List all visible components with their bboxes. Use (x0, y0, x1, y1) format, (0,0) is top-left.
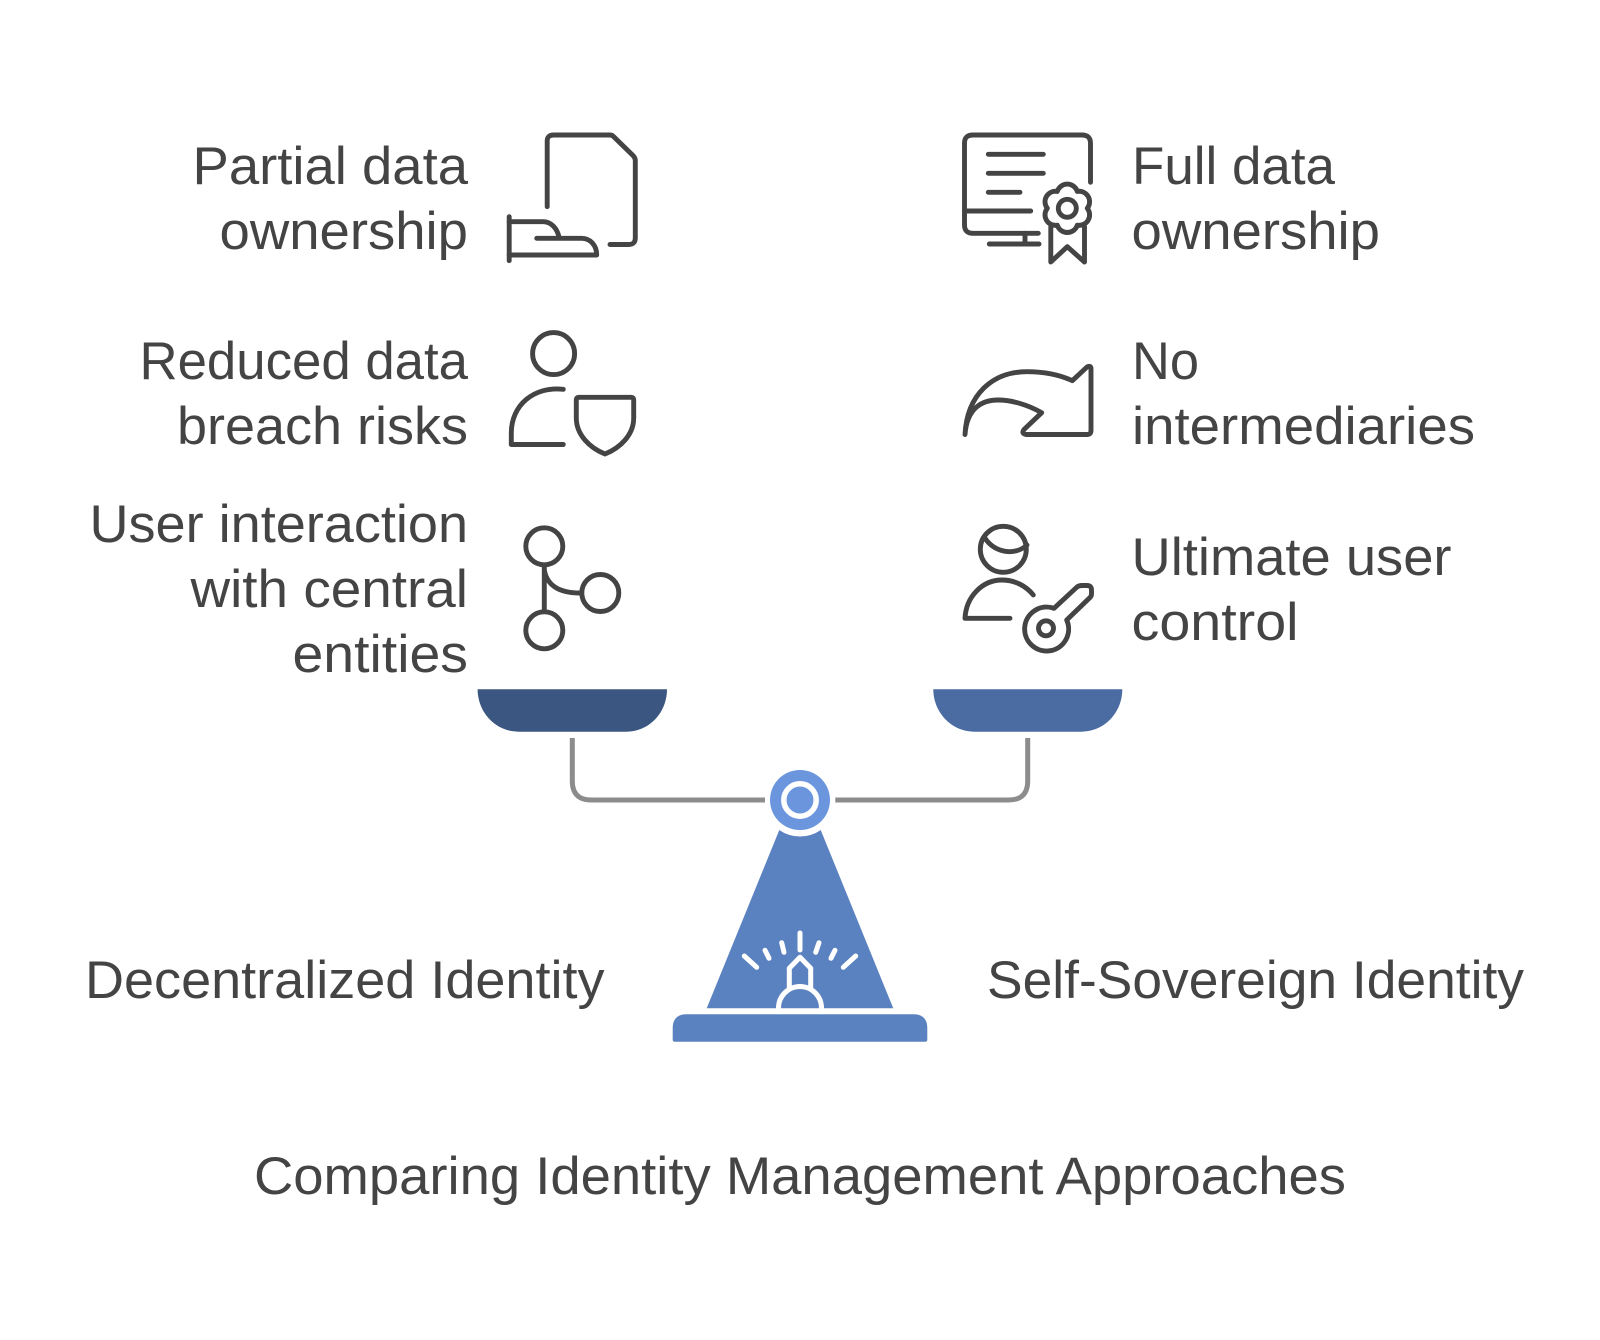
text: partial data ownership: ownership (220, 202, 468, 261)
icon: person with key (965, 526, 1092, 651)
text: user interaction with central entities: entities (292, 625, 468, 684)
icon: curved arrow (965, 366, 1091, 434)
icon: certificate on monitor (964, 135, 1090, 262)
label: decentralized identity: Decentralized Identity (85, 951, 605, 1010)
icon: connected nodes (526, 528, 619, 649)
icon: person with shield (511, 333, 634, 454)
text: ultimate user control (1132, 528, 1452, 652)
text: reduced data breach risks: Reduced data (140, 332, 469, 391)
text: no intermediaries (1132, 332, 1475, 456)
text: user interaction with central entities: with central (189, 560, 468, 619)
text: user interaction with central entities (90, 495, 468, 684)
label: self-sovereign identity: Self-Sovereign Identity (987, 951, 1524, 1010)
text: partial data ownership (192, 137, 469, 261)
scale arm: right (835, 738, 1028, 800)
text: partial data ownership: Partial data (192, 137, 469, 196)
text: ultimate user control: Ultimate user (1132, 528, 1452, 587)
icon: document in hand (509, 135, 635, 261)
scale stand with bell icon (673, 830, 927, 1042)
scale pan: right (933, 689, 1122, 732)
text: user interaction with central entities: User interaction (90, 495, 468, 554)
text: ultimate user control: control (1132, 593, 1298, 652)
text: full data ownership (1132, 137, 1380, 261)
scale pan: left (478, 689, 667, 732)
text: reduced data breach risks: breach risks (177, 397, 468, 456)
text: no intermediaries: intermediaries (1132, 397, 1475, 456)
title: Comparing Identity Management Approaches (254, 1147, 1346, 1206)
scale pivot (770, 770, 830, 830)
text: full data ownership: ownership (1132, 202, 1380, 261)
scale arm: left (572, 738, 765, 800)
text: no intermediaries: No (1132, 332, 1199, 391)
text: reduced data breach risks (140, 332, 469, 456)
text: full data ownership: Full data (1132, 137, 1336, 196)
